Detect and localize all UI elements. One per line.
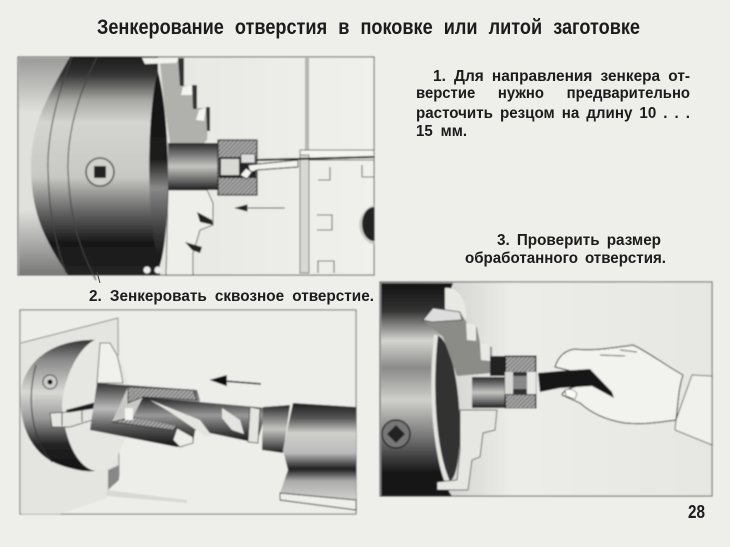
chuck key socket: [86, 158, 114, 186]
chuck key socket: [43, 375, 57, 389]
boring tool: [240, 157, 374, 179]
chuck upper jaw: [97, 343, 123, 383]
title: Зенкерование отверстия в поковке или литой заготовке: [97, 16, 640, 39]
workpiece section: [490, 356, 536, 408]
panel 2: countersinking through-hole: [20, 310, 356, 514]
tailstock: [280, 403, 356, 503]
machine wedge background: [21, 318, 119, 514]
instruction 3 text: 3. Проверить размер: [497, 232, 661, 249]
hand: [555, 345, 683, 424]
feed arrow: [236, 205, 285, 211]
panel 1: boring the hole: [18, 57, 374, 280]
gauge handle: [538, 369, 614, 398]
instruction 1 text: 1. Для направления зенкера от-: [433, 68, 690, 85]
instruction 2 text: 2. Зенкеровать сквозное отверстие.: [89, 288, 374, 305]
tool holder: [300, 58, 374, 273]
chuck: [21, 339, 130, 471]
panel 3: checking hole size: [380, 282, 712, 496]
spindle stub: [472, 377, 505, 408]
lower jaw: [144, 190, 213, 275]
chuck body: [381, 283, 453, 496]
tailstock base: [280, 493, 356, 510]
chuck grooves: [48, 57, 97, 280]
instruction 1 text: верстие нужно предварительно: [416, 85, 690, 102]
upper jaw: [142, 58, 210, 143]
panel 1 tail mark: [97, 272, 100, 283]
chuck left jaw: [50, 401, 102, 427]
workpiece section: [218, 140, 257, 195]
quill sleeve: [262, 405, 290, 453]
feed arrow: [212, 376, 261, 385]
upper jaw: [423, 308, 492, 376]
page number: 28: [688, 502, 705, 522]
instruction 1 text: 15 мм.: [416, 123, 467, 140]
chuck face: [432, 288, 466, 482]
instruction 1 text: расточить резцом на длину 10 . . .: [416, 105, 690, 122]
shirt cuff: [675, 375, 712, 445]
workpiece: [90, 383, 200, 447]
instruction 1 text: [416, 68, 690, 140]
chuck recess: [149, 72, 168, 265]
left background of panel 1: [19, 58, 79, 275]
key socket: [382, 420, 410, 448]
instruction 3 text: [465, 232, 666, 267]
chuck body: [31, 57, 160, 275]
countersink drill: [125, 397, 267, 443]
lower jaw: [437, 410, 497, 490]
instruction 3 text: обработанного отверстия.: [465, 250, 666, 267]
spindle stub: [168, 143, 218, 190]
